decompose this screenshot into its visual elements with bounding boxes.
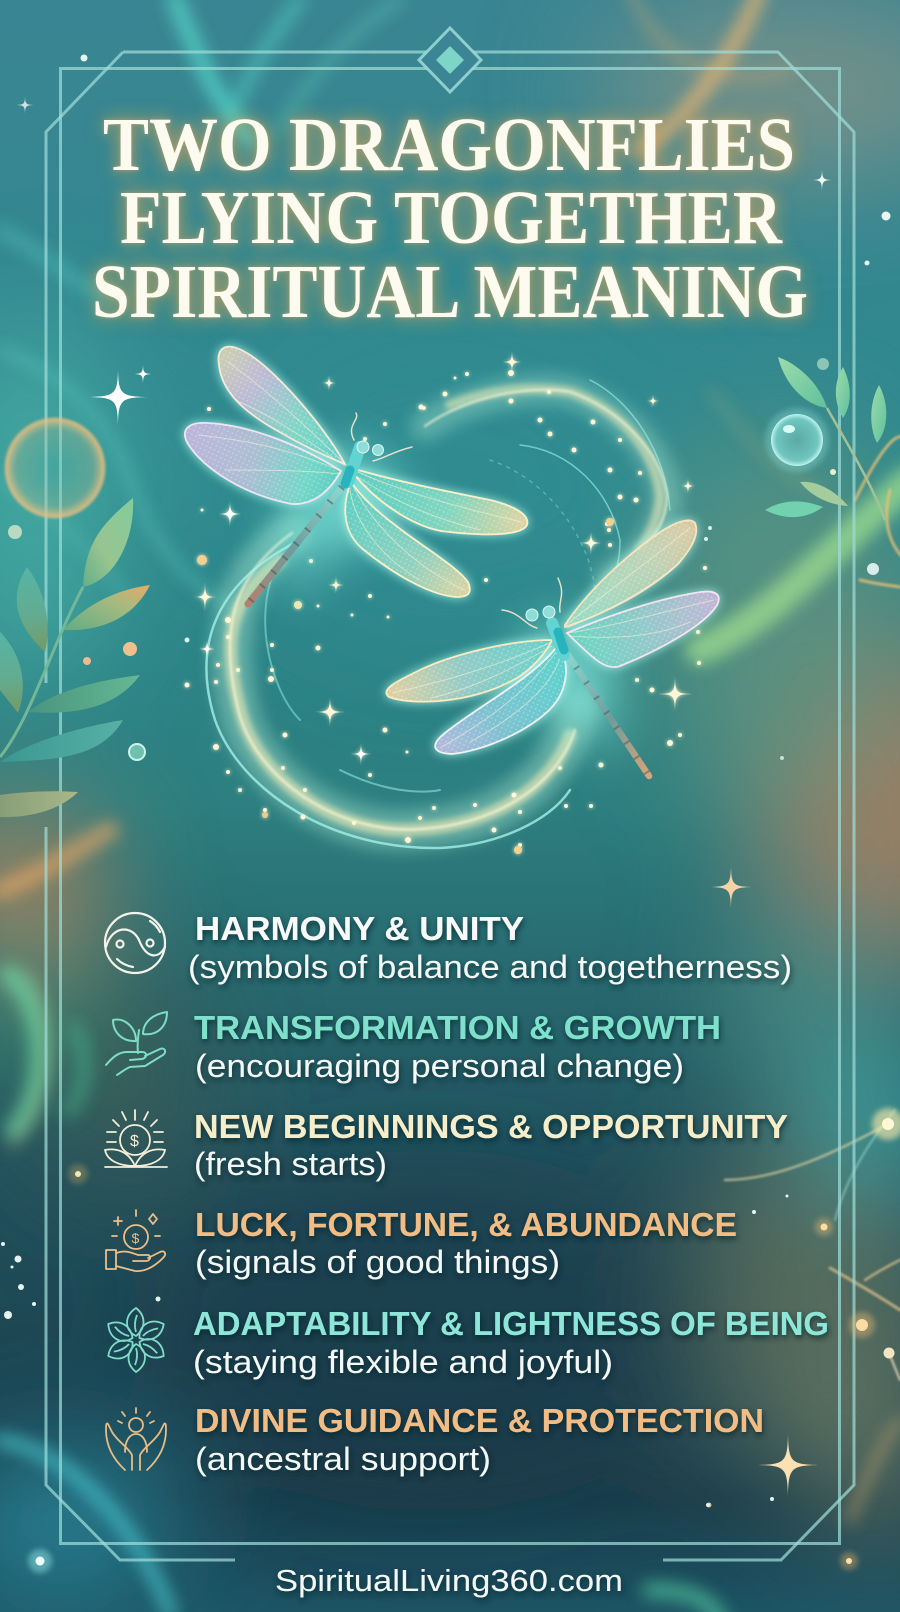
wing veins — [198, 362, 522, 590]
swirling light trails — [206, 380, 670, 848]
body glow — [270, 450, 400, 595]
title — [92, 103, 808, 334]
body glow — [515, 620, 625, 760]
footer website: SpiritualLiving360.com — [275, 1563, 623, 1598]
icon: leafy branch — [0, 498, 150, 817]
title: FLYING TOGETHER — [120, 176, 783, 260]
heading: TRANSFORMATION & GROWTH — [194, 1009, 721, 1046]
wings — [185, 347, 527, 597]
right side botanical decoration — [704, 169, 890, 1508]
icon: person between hands — [106, 1408, 166, 1470]
icon: top diamond ornament — [419, 28, 481, 92]
icon: sprout in hand — [106, 1012, 167, 1075]
heading: ADAPTABILITY & LIGHTNESS OF BEING — [193, 1305, 829, 1342]
icon: coin over hand: $ — [132, 1230, 140, 1246]
icon: glass bubble — [765, 408, 829, 472]
dragonfly: lower right — [386, 520, 719, 776]
description: (signals of good things) — [195, 1244, 560, 1280]
icon: coin over hand — [106, 1210, 165, 1271]
scattered star particles — [184, 351, 707, 854]
icon: white sparkles — [15, 54, 153, 424]
description: (encouraging personal change) — [195, 1048, 684, 1084]
wing mesh — [185, 347, 527, 597]
wing veins — [392, 528, 714, 748]
heading: HARMONY & UNITY — [195, 910, 524, 947]
title: SPIRITUAL MEANING — [92, 250, 808, 334]
body — [248, 413, 412, 604]
heading: LUCK, FORTUNE, & ABUNDANCE — [195, 1206, 737, 1243]
icon: coin sunrise over leaves — [105, 1110, 167, 1167]
small orbs — [704, 358, 879, 760]
icon: coin sunrise over leaves: $ — [130, 1133, 139, 1150]
description: (symbols of balance and togetherness) — [188, 949, 792, 985]
item 4: luck and fortune — [106, 1206, 737, 1280]
heading: NEW BEGINNINGS & OPPORTUNITY — [194, 1108, 788, 1145]
small orbs — [8, 525, 190, 760]
icon: sparkle and dots — [706, 169, 890, 1508]
dragonfly: upper left — [185, 347, 527, 604]
icon: leaves — [765, 357, 886, 520]
item 6: divine guidance — [106, 1402, 764, 1477]
left side botanical decoration — [0, 54, 190, 817]
icon: yin yang — [105, 913, 165, 973]
lower decorative lights — [1, 1108, 900, 1573]
item 2: transformation and growth — [106, 1009, 721, 1084]
description: (staying flexible and joyful) — [193, 1344, 613, 1380]
wings — [386, 520, 719, 754]
icon: pinwheel flower — [104, 1308, 168, 1372]
description: (fresh starts) — [194, 1146, 387, 1182]
item 1: harmony and unity — [105, 910, 792, 985]
body — [502, 578, 649, 776]
icon: glowing orange orb — [4, 417, 106, 519]
wing mesh — [386, 520, 719, 754]
item 5: adaptability — [104, 1305, 829, 1380]
title: TWO DRAGONFLIES — [103, 103, 795, 187]
list of meanings — [104, 910, 829, 1477]
item 3: new beginnings — [105, 1108, 788, 1182]
description: (ancestral support) — [195, 1441, 491, 1477]
heading: DIVINE GUIDANCE & PROTECTION — [195, 1402, 764, 1439]
